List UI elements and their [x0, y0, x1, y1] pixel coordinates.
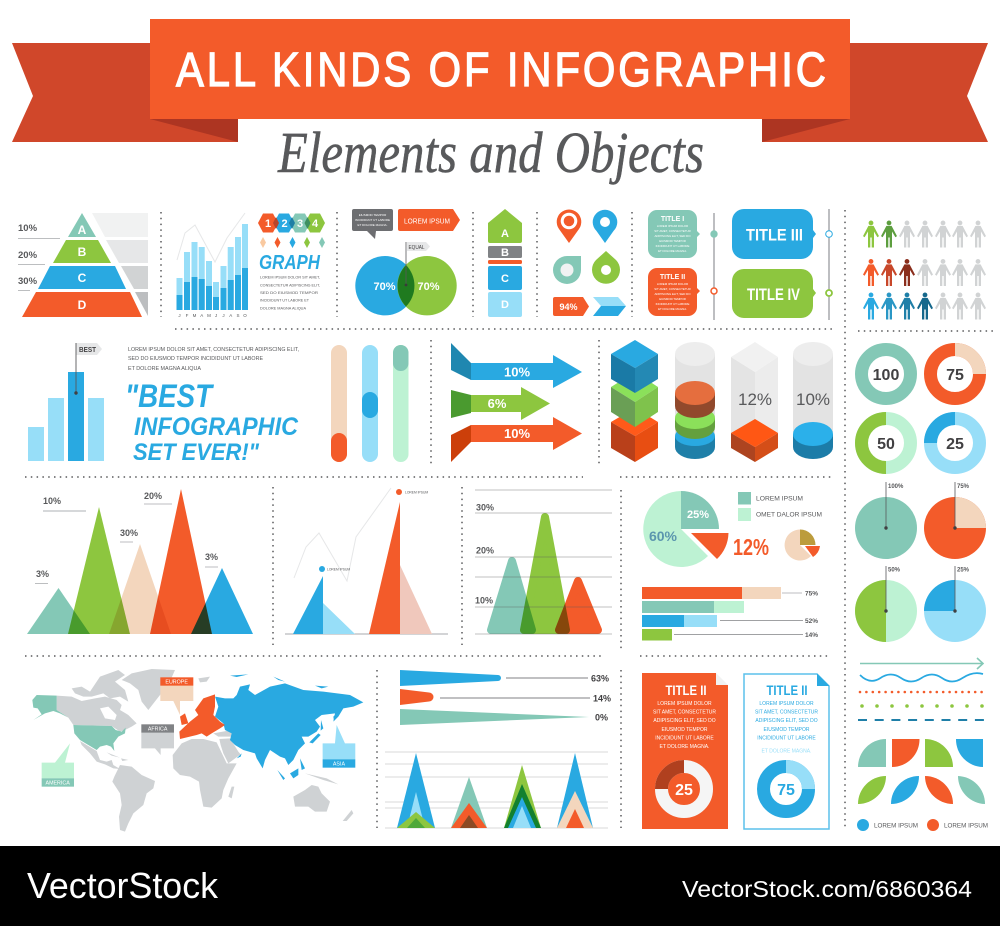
month labels: S	[236, 313, 240, 318]
triangle labels: 30%	[120, 528, 138, 538]
light bars	[176, 224, 248, 310]
pyramid percent labels	[18, 223, 60, 290]
panel: small title cards	[648, 210, 718, 320]
speech bubble: EIUSMOD TEMPOR	[359, 213, 387, 217]
equal marker: EQUAL	[408, 245, 425, 251]
region: asia	[215, 674, 363, 780]
card donut 25	[662, 766, 706, 812]
month labels: O	[243, 313, 247, 318]
panel: orange document card: INCIDIDUNT UT LABORE	[655, 736, 714, 742]
card: title I	[648, 210, 700, 258]
card: title II: ADIPISCING ELIT, SED DO	[655, 292, 691, 296]
people row: orange	[863, 259, 986, 286]
panel: blue document card: LOREM IPSUM DOLOR	[759, 701, 814, 707]
footer bar	[0, 846, 1000, 926]
cube: blue	[611, 340, 658, 393]
pie legend: OMET DALOR IPSUM	[756, 512, 822, 518]
card: title II: INCIDIDUNT UT LABORE	[656, 302, 689, 306]
panel: stacked cylinder	[675, 342, 715, 459]
panel: venn diagram	[352, 209, 460, 315]
callout: europe: EUROPE	[165, 680, 188, 686]
land: africa, middle east, oceania	[173, 677, 353, 821]
card: title I: EIUSMOD TEMPOR	[659, 239, 686, 243]
venn circles: 70%	[417, 281, 440, 293]
graph body text: DOLORE MAGNA ALIQUA	[260, 306, 307, 310]
numbered hexagons: 3	[297, 218, 303, 230]
panel: rounded triangle chart	[475, 490, 612, 634]
panel: horizontal stacked bars	[642, 587, 818, 640]
legend: lorem ipsum: LOREM IPSUM	[874, 822, 918, 830]
panel: cylinder 10%: 10%	[796, 390, 830, 409]
panel: map pins and tags	[553, 210, 626, 316]
region: europe	[179, 694, 225, 739]
subtitle: Elements and Objects	[277, 120, 704, 185]
axis labels: 10%	[475, 596, 493, 606]
pie 50%: 50%	[888, 568, 901, 574]
panel: exploded pie chart	[643, 491, 769, 567]
gridlines	[475, 490, 612, 634]
numbered hexagons: 4	[312, 218, 319, 230]
nested triangle group 1	[397, 753, 435, 828]
triangle labels: 3%	[205, 552, 218, 562]
pyramid layers: C	[78, 271, 87, 285]
month labels	[178, 313, 247, 318]
panel: orange document card: ET DOLORE MAGNA.	[660, 744, 709, 750]
baseline	[285, 633, 448, 635]
rounded triangles	[491, 517, 598, 630]
panel: pie charts with pins	[855, 482, 986, 642]
taper: 14%	[400, 689, 611, 705]
dotted green line	[862, 704, 983, 708]
card: title IV: TITLE IV	[747, 285, 801, 304]
text block: lorem ipsum intro: SED DO EIUSMOD TEMPOR INCIDIDUNT UT LABORE	[128, 356, 263, 362]
graph body text: LOREM IPSUM DOLOR SIT AMET,	[260, 276, 320, 280]
pyramid percent labels: 10%	[18, 223, 38, 234]
donut 100: 100	[873, 367, 899, 384]
pyramid layers: D	[78, 298, 87, 312]
pyramid layers	[22, 213, 142, 317]
callout: america: AMERICA	[46, 781, 70, 787]
quote: best infographic set ever: "BEST	[125, 378, 214, 414]
panel: vertical sliders	[331, 345, 408, 462]
graph body text: SED DO EIUSMOD TEMPOR	[260, 291, 318, 295]
slider: peach	[331, 345, 347, 462]
callout: africa	[141, 724, 174, 755]
speech bubble	[352, 209, 393, 239]
quote: best infographic set ever: INFOGRAPHIC	[134, 413, 299, 441]
taper: 14%: 14%	[593, 694, 611, 704]
orange pin	[557, 210, 581, 243]
region: america	[32, 695, 126, 751]
panel: stacked A B C D blocks	[488, 209, 522, 317]
legend: lorem ipsum: LOREM IPSUM	[944, 822, 988, 830]
card: title I: LOREM IPSUM DOLOR	[657, 224, 688, 228]
best flag: BEST	[79, 347, 97, 354]
pie 100%	[855, 482, 917, 559]
cube: orange	[611, 408, 658, 462]
panel: large title cards	[732, 209, 832, 320]
nested triangle group 2	[451, 777, 487, 828]
orange label tag: LOREM IPSUM	[404, 216, 450, 226]
diamond row	[260, 237, 325, 248]
taper: 0%	[400, 709, 608, 725]
small exploded pie	[785, 530, 820, 560]
quote: best infographic set ever	[125, 378, 299, 466]
series labels: LOREM IPSUM	[327, 568, 350, 572]
panel: paired triangle chart	[285, 488, 448, 634]
series labels	[319, 489, 428, 572]
people row: blue	[863, 292, 986, 320]
triangle labels	[35, 491, 218, 584]
card donut 75: 75	[777, 782, 795, 799]
ribbon tails	[12, 43, 988, 142]
bar 52%	[642, 615, 818, 627]
numbered hexagons: 2	[281, 218, 288, 230]
panel: blue document card: INCIDIDUNT UT LABORE	[757, 736, 816, 742]
trend line	[177, 213, 245, 262]
panel: world map	[32, 669, 363, 832]
taper: 63%	[400, 670, 609, 686]
graph body text: INCIDIDUNT UT LABORE ET	[260, 298, 310, 302]
panel: blue document card	[744, 674, 830, 829]
venn circles: 70%	[373, 281, 396, 293]
timeline dots	[710, 230, 718, 294]
panel: orange document card: LOREM IPSUM DOLOR	[657, 701, 712, 707]
card: title II: SIT AMET, CONSECTETUR	[654, 287, 691, 291]
panel: blue document card: TITLE II	[766, 683, 808, 698]
graph heading: GRAPH	[259, 252, 320, 274]
panel: best bar chart	[28, 343, 104, 461]
month labels: F	[186, 313, 189, 318]
panel: stacked A B C D blocks: C	[501, 273, 509, 285]
pyramid layers: A	[78, 223, 87, 237]
month labels: J	[178, 313, 181, 318]
panel: orange document card: EIUSMOD TEMPOR	[661, 727, 708, 733]
card: title III: TITLE III	[746, 226, 803, 244]
panel: people pictograms	[863, 220, 986, 320]
callout: america	[42, 743, 74, 787]
dotted orange line	[860, 691, 983, 693]
pie legend	[738, 492, 822, 521]
panel: stacked A B C D blocks: D	[501, 299, 509, 311]
pie legend: LOREM IPSUM	[756, 496, 803, 502]
nested triangle group 3	[504, 765, 541, 828]
graph body text: CONSECTETUR ADIPISCING ELIT,	[260, 284, 320, 288]
chevron	[593, 297, 626, 316]
triangle labels: 3%	[36, 569, 49, 579]
card: title II	[648, 268, 700, 316]
pyramid percent labels: 20%	[18, 250, 38, 261]
title text: ALL KINDS OF INFOGRAPHIC	[176, 42, 826, 97]
panel: orange document card	[642, 673, 728, 829]
layer: blue	[675, 426, 715, 459]
orange triangle pair	[369, 502, 432, 634]
series labels: LOREM IPSUM	[405, 490, 428, 494]
bar 75%: 75%	[805, 590, 818, 598]
donut 50: 50	[877, 436, 895, 453]
land: north america and greenland	[57, 669, 175, 832]
panel: nested triangle chart	[385, 752, 608, 828]
panel: stacked A B C D blocks: A	[501, 228, 509, 240]
map: americas and arctic	[32, 669, 175, 832]
panel: blue document card: ADIPISCING ELIT, SED DO	[755, 718, 818, 724]
panel: exploded pie chart: 25%	[687, 509, 709, 521]
bar 14%	[642, 629, 818, 640]
axis labels	[475, 502, 494, 606]
graph body text	[260, 276, 320, 310]
callout: africa: AFRICA	[148, 727, 168, 733]
panel: stacked isometric cubes	[611, 340, 658, 462]
card: title I: ET DOLORE MAGNA.	[658, 249, 687, 253]
layer: green	[675, 407, 715, 439]
slider: blue	[362, 345, 378, 462]
speech bubble: ET DOLORE MAGNA.	[358, 223, 388, 227]
donut 75: 75	[946, 367, 964, 384]
callout: asia: ASIA	[333, 761, 345, 767]
panel: leaf shapes	[858, 776, 985, 804]
pyramid percent labels: 30%	[18, 276, 38, 287]
bar 14%: 14%	[805, 632, 818, 639]
timeline rings	[826, 231, 832, 296]
panel: horizontal tapered bars	[400, 670, 611, 725]
dark bars	[176, 268, 248, 310]
banner title	[12, 19, 988, 142]
slider: mint	[393, 345, 408, 462]
pie 25%	[924, 566, 986, 642]
panel: orange document card: SIT AMET, CONSECTETUR	[653, 710, 716, 716]
panel: isometric box 12%: 12%	[738, 390, 772, 409]
card: title I: INCIDIDUNT UT LABORE	[656, 244, 689, 248]
speech bubble: INCIDIDUNT UT LABORE	[355, 218, 390, 222]
panel: isometric box 12%	[731, 342, 778, 462]
dashed blue line	[858, 719, 984, 721]
donut 25: 25	[946, 436, 964, 453]
month labels: A	[200, 313, 203, 318]
arrow line	[860, 658, 983, 669]
pyramid layers: B	[78, 245, 87, 259]
month labels: J	[215, 313, 217, 318]
percent tag: 94%	[560, 302, 578, 313]
bar teal	[642, 601, 744, 613]
map: eurasia, africa and oceania	[173, 674, 363, 821]
text block: lorem ipsum intro	[128, 347, 299, 372]
text block: lorem ipsum intro: LOREM IPSUM DOLOR SIT AMET, CONSECTETUR ADIPISCING ELIT,	[128, 347, 299, 353]
callout: europe	[160, 677, 193, 715]
pie 25%: 25%	[957, 568, 970, 574]
teal drop	[553, 256, 581, 284]
venn circles	[355, 256, 457, 315]
card: title II: TITLE II	[660, 274, 685, 281]
card: title I: ADIPISCING ELIT, SED DO	[655, 234, 691, 238]
card: title II: LOREM IPSUM DOLOR	[657, 282, 688, 286]
pie 75%	[924, 482, 986, 559]
footer brand: VectorStock	[27, 865, 219, 906]
panel: overlapping triangle chart	[27, 489, 253, 634]
panel: blue document card: SIT AMET, CONSECTETUR	[755, 710, 818, 716]
triangle labels: 10%	[43, 496, 61, 506]
trend line	[294, 488, 391, 581]
taper: 63%: 63%	[591, 674, 609, 684]
panel: exploded pie chart: 60%	[649, 528, 678, 544]
panel: percentage arrows	[451, 343, 582, 462]
ribbon main band	[150, 19, 850, 119]
numbered hexagons: 1	[265, 218, 271, 230]
triangle labels: 20%	[144, 491, 162, 501]
month labels: J	[222, 313, 225, 318]
panel: quarter circle shapes	[858, 739, 983, 767]
panel: blue document card: ET DOLORE MAGNA.	[762, 748, 811, 754]
nested triangle group 4	[557, 753, 593, 828]
green drop	[592, 251, 620, 284]
card: title I: SIT AMET, CONSECTETUR	[654, 229, 691, 233]
panel: donut charts	[862, 350, 980, 468]
card: title II: ET DOLORE MAGNA.	[658, 307, 687, 311]
arrow: green 6%: 6%	[488, 396, 507, 411]
panel: line styles	[858, 658, 984, 720]
axis labels: 30%	[476, 502, 494, 512]
panel: orange document card: ADIPISCING ELIT, SED DO	[653, 718, 716, 724]
callout: asia	[323, 725, 355, 768]
blue triangle pair	[293, 576, 355, 634]
taper: 0%: 0%	[595, 712, 608, 722]
quote: best infographic set ever: SET EVER!"	[133, 439, 260, 466]
cube: green	[611, 372, 658, 427]
numbered hexagons	[258, 214, 325, 232]
card donut 75	[764, 766, 808, 812]
blue pin	[593, 210, 617, 243]
wavy line	[860, 673, 983, 682]
axis labels: 20%	[476, 546, 494, 556]
panel: orange document card: TITLE II	[666, 683, 706, 698]
bar 52%: 52%	[805, 618, 818, 625]
month labels: M	[207, 313, 211, 318]
panel: exploded pie chart: 12%	[733, 534, 769, 560]
overlapping triangles	[27, 489, 253, 634]
panel: stacked A B C D blocks: B	[501, 247, 509, 259]
panel: monthly bar chart with graph heading	[176, 213, 325, 318]
arrow: blue 10%: 10%	[504, 364, 530, 380]
panel: pyramid	[18, 213, 148, 317]
card: title I: TITLE I	[661, 216, 684, 223]
bar 75%	[642, 587, 818, 599]
footer url: VectorStock.com/6860364	[682, 876, 972, 902]
pie 100%: 100%	[888, 484, 904, 490]
panel: blue document card: EIUSMOD TEMPOR	[763, 727, 810, 733]
panel: cylinder 10%	[793, 342, 833, 459]
layer: orange	[675, 381, 715, 418]
text block: lorem ipsum intro: ET DOLORE MAGNA ALIQUA	[128, 366, 201, 372]
arrow: orange 10%: 10%	[504, 426, 530, 441]
pie 75%: 75%	[957, 484, 970, 490]
pie 50%	[855, 566, 917, 642]
card donut 25: 25	[675, 782, 693, 799]
month labels: M	[193, 313, 197, 318]
month labels: A	[229, 313, 232, 318]
legend: lorem ipsum	[857, 819, 988, 831]
card: title II: EIUSMOD TEMPOR	[659, 297, 686, 301]
people row: green	[863, 220, 986, 248]
pyramid shadows	[92, 213, 148, 316]
